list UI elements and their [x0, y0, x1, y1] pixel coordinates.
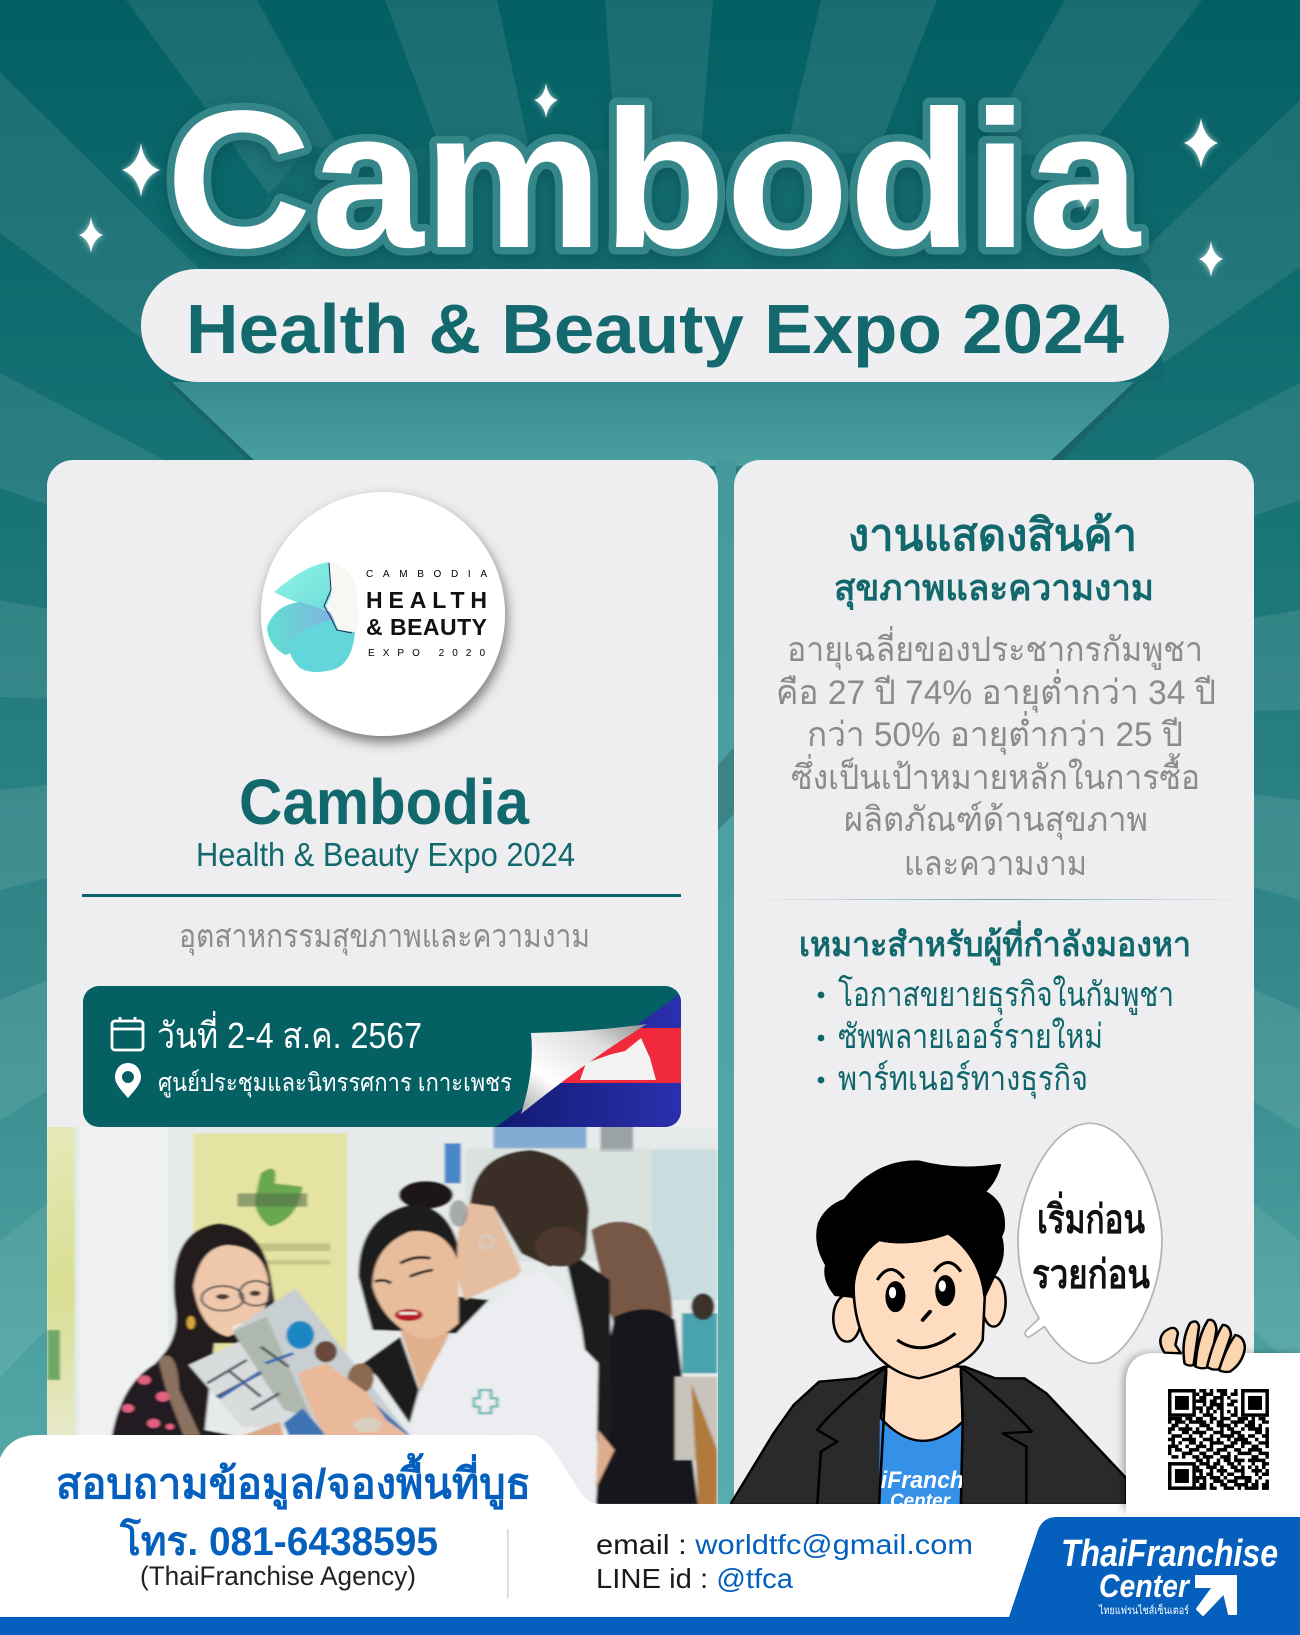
shirt logo text: Center: [890, 1491, 952, 1512]
body text: ผลิตภัณฑ์ด้านสุขภาพ: [844, 801, 1148, 840]
body text: และความงาม: [904, 845, 1087, 883]
heading: trade show: งานแสดงสินค้า: [848, 511, 1137, 560]
logo circle: EXPO 2020: [368, 648, 485, 659]
subtitle text: Health & Beauty Expo 2024: [186, 290, 1124, 368]
icon: arrow: [1196, 1576, 1236, 1615]
logo circle: HEALTH: [366, 587, 487, 613]
footer: blue bar and ThaiFranchise Center logo: ไทยแฟรนไชส์เซ็นเตอร์: [1098, 1603, 1189, 1617]
body text: ซึ่งเป็นเป้าหมายหลักในการซื้อ: [791, 753, 1200, 797]
event photo: [42, 1123, 726, 1507]
body text: คือ 27 ปี 74% อายุต่ำกว่า 34 ปี: [776, 669, 1216, 713]
footer: booking enquiry text: สอบถามข้อมูล/จองพื้นที่บูธ: [56, 1452, 531, 1510]
bullet list: [818, 975, 1174, 1099]
bullet list: พาร์ทเนอร์ทางธุรกิจ: [838, 1060, 1088, 1099]
venue text: ศูนย์ประชุมและนิทรรศการ เกาะเพชร: [158, 1069, 512, 1098]
hand holding QR card: [1160, 1320, 1245, 1372]
flag corner: [496, 993, 681, 1127]
shirt logo text: [880, 1470, 962, 1504]
bubble text: เริ่มก่อน: [1037, 1191, 1145, 1242]
heading: health and beauty: สุขภาพและความงาม: [834, 567, 1154, 611]
agency name: (ThaiFranchise Agency): [140, 1561, 416, 1591]
date text: วันที่ 2-4 ส.ค. 2567: [157, 1011, 422, 1056]
bullet list: ซัพพลายเออร์รายใหม่: [838, 1017, 1103, 1056]
main title: Cambodia: Cambodia: [166, 70, 1142, 289]
card subtitle: Health & Beauty Expo 2024: [196, 836, 575, 873]
date and venue banner: [83, 986, 681, 1127]
industry text: อุตสาหกรรมสุขภาพและความงาม: [179, 918, 590, 956]
footer background: [0, 1435, 1300, 1635]
card title: Cambodia: [239, 766, 529, 838]
logo circle: CAMBODIA: [366, 569, 487, 580]
body text: อายุเฉลี่ยของประชากรกัมพูชา: [787, 626, 1203, 670]
logo circle: & BEAUTY: [366, 614, 487, 640]
icon: calendar: [112, 1017, 143, 1050]
footer: contact details: email : worldtfc@gmail.com: [596, 1529, 973, 1560]
bullet list: โอกาสขยายธุรกิจในกัมพูชา: [838, 975, 1174, 1015]
body text: กว่า 50% อายุต่ำกว่า 25 ปี: [807, 711, 1183, 755]
QR code: [1168, 1391, 1269, 1488]
QR card: [1126, 1353, 1300, 1520]
logo circle: [261, 492, 505, 736]
heading: suitable for: เหมาะสำหรับผู้ที่กำลังมองหา: [799, 920, 1191, 966]
icon: location pin: [115, 1063, 141, 1098]
subtitle pill: [141, 269, 1169, 382]
footer: contact details: [596, 1529, 973, 1594]
sparkle stars: [79, 83, 1223, 277]
footer: blue bar and ThaiFranchise Center logo: Center: [1099, 1568, 1190, 1604]
speech bubble: [1018, 1123, 1162, 1363]
footer: contact details: LINE id : @tfca: [596, 1563, 793, 1594]
panel: right info card: [734, 460, 1254, 1520]
phone number: โทร. 081-6438595: [119, 1518, 438, 1564]
shirt logo text: aiFranch: [868, 1467, 964, 1494]
footer: blue bar and ThaiFranchise Center logo: [0, 1517, 1300, 1635]
panel: left expo card: [47, 460, 718, 1520]
divider: [82, 894, 681, 897]
mascot character: [730, 1162, 1126, 1505]
footer: booking enquiry text: [56, 1452, 531, 1591]
speech bubble: รวยก่อน: [1032, 1253, 1150, 1297]
body text: [776, 626, 1216, 883]
